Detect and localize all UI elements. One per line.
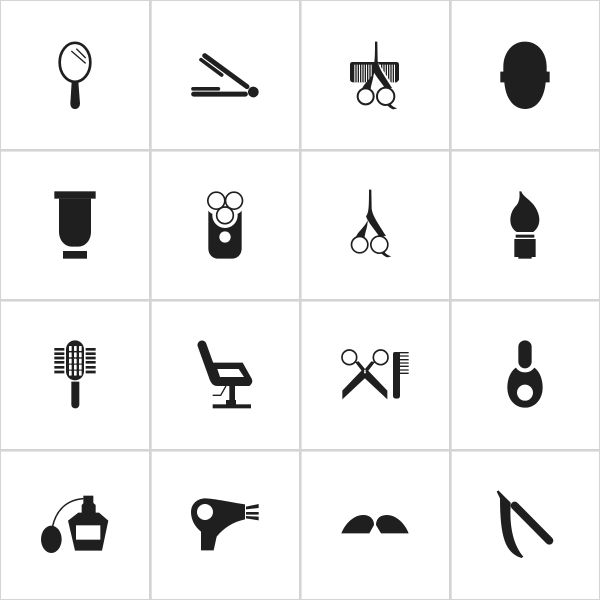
icon: paint brush [510,191,539,259]
icon: electric shaver [208,192,242,259]
icon: scissors [351,190,391,257]
icon: hair dryer [191,498,259,550]
icon: moustache [341,515,409,533]
icon: perfume bottle [41,496,108,553]
icon: comb and scissors [350,42,399,109]
icon: crossed scissors and comb [342,350,409,399]
icon: hair brush [54,340,96,408]
icon: straight razor [497,490,549,558]
icon: cup with base [54,191,96,259]
icon: barber chair [202,345,252,408]
icon: nail polish [507,340,543,408]
icon: hair straightener [193,56,259,97]
icon: hand mirror [60,43,90,109]
icon: bald head [500,42,550,109]
